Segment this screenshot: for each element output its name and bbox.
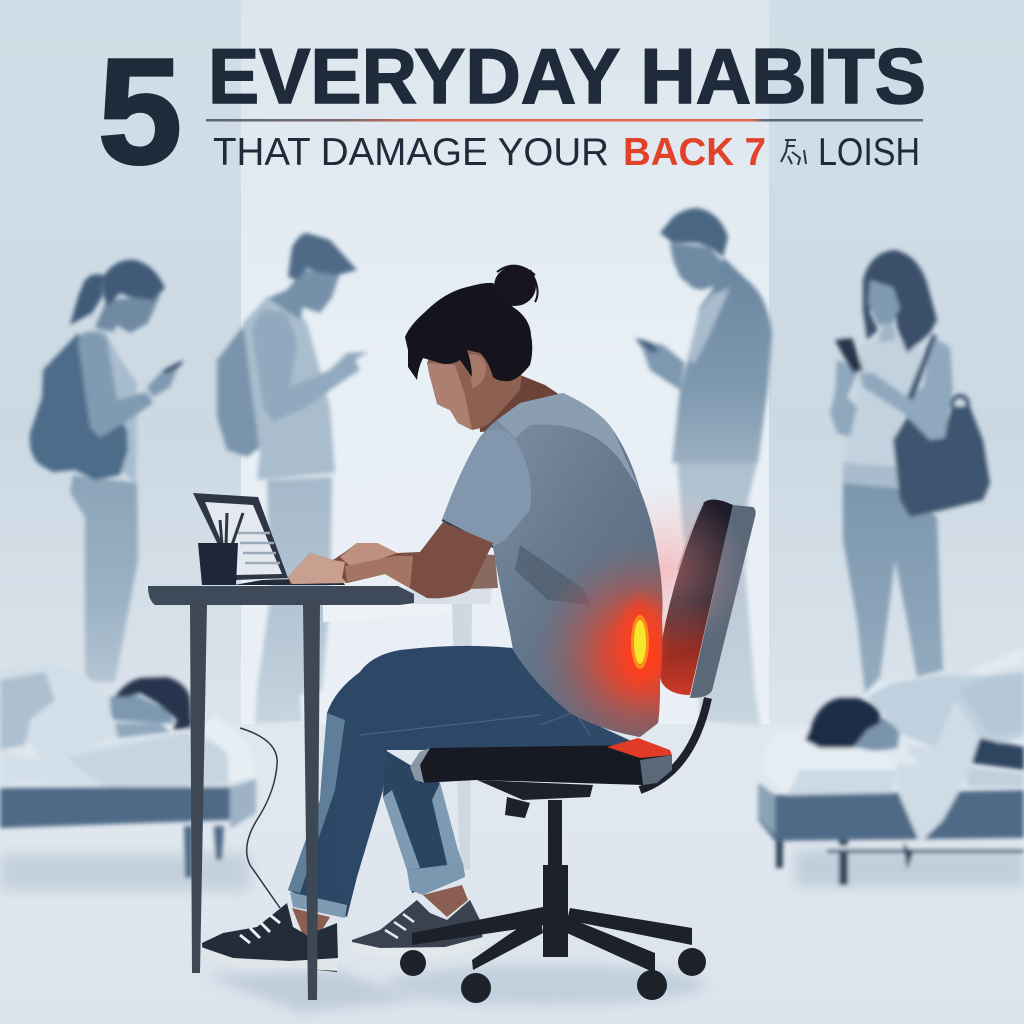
chair seat xyxy=(410,738,672,785)
desk xyxy=(148,586,414,1000)
background figure: man with backpack xyxy=(217,233,368,724)
chair backrest xyxy=(658,499,756,698)
back shoe xyxy=(352,900,483,958)
left bed with sleeping person xyxy=(0,663,256,891)
right bed with sleeping person xyxy=(758,648,1024,887)
head and face xyxy=(427,330,525,430)
background figure: woman with ponytail and backpack xyxy=(30,260,184,682)
near arm and hands xyxy=(288,522,493,598)
icon: small figures in subtitle xyxy=(781,140,806,165)
front leg jeans xyxy=(288,646,640,918)
background figure: woman with tote bag xyxy=(830,250,990,693)
title divider xyxy=(206,119,923,122)
back ankle xyxy=(423,885,468,917)
chair strut xyxy=(640,698,708,790)
pencil cup xyxy=(198,513,243,585)
floor shadows xyxy=(205,965,705,1012)
pain halo behind back xyxy=(580,485,750,655)
title: Everyday Habits: EVERYDAY HABITS xyxy=(208,32,926,120)
back leg jeans xyxy=(383,750,465,895)
far forearm xyxy=(440,552,498,590)
shirt torso xyxy=(442,393,670,745)
charging cable xyxy=(240,728,280,908)
hair xyxy=(405,266,538,381)
subtitle: THAT DAMAGE YOUR xyxy=(213,131,609,174)
subtitle: BACK 7 xyxy=(623,131,766,174)
title number 5: 5 xyxy=(98,27,182,195)
background figure: man looking at phone xyxy=(635,208,772,725)
front ankle xyxy=(292,908,330,935)
laptop xyxy=(193,493,345,585)
front shoe xyxy=(201,903,338,972)
subtitle: LOISH xyxy=(818,131,920,174)
subtitle xyxy=(213,131,920,174)
lower back pain glow xyxy=(620,598,660,686)
chair base and wheels xyxy=(400,780,706,1003)
neck xyxy=(478,375,563,432)
back table edge and leg xyxy=(323,588,492,870)
